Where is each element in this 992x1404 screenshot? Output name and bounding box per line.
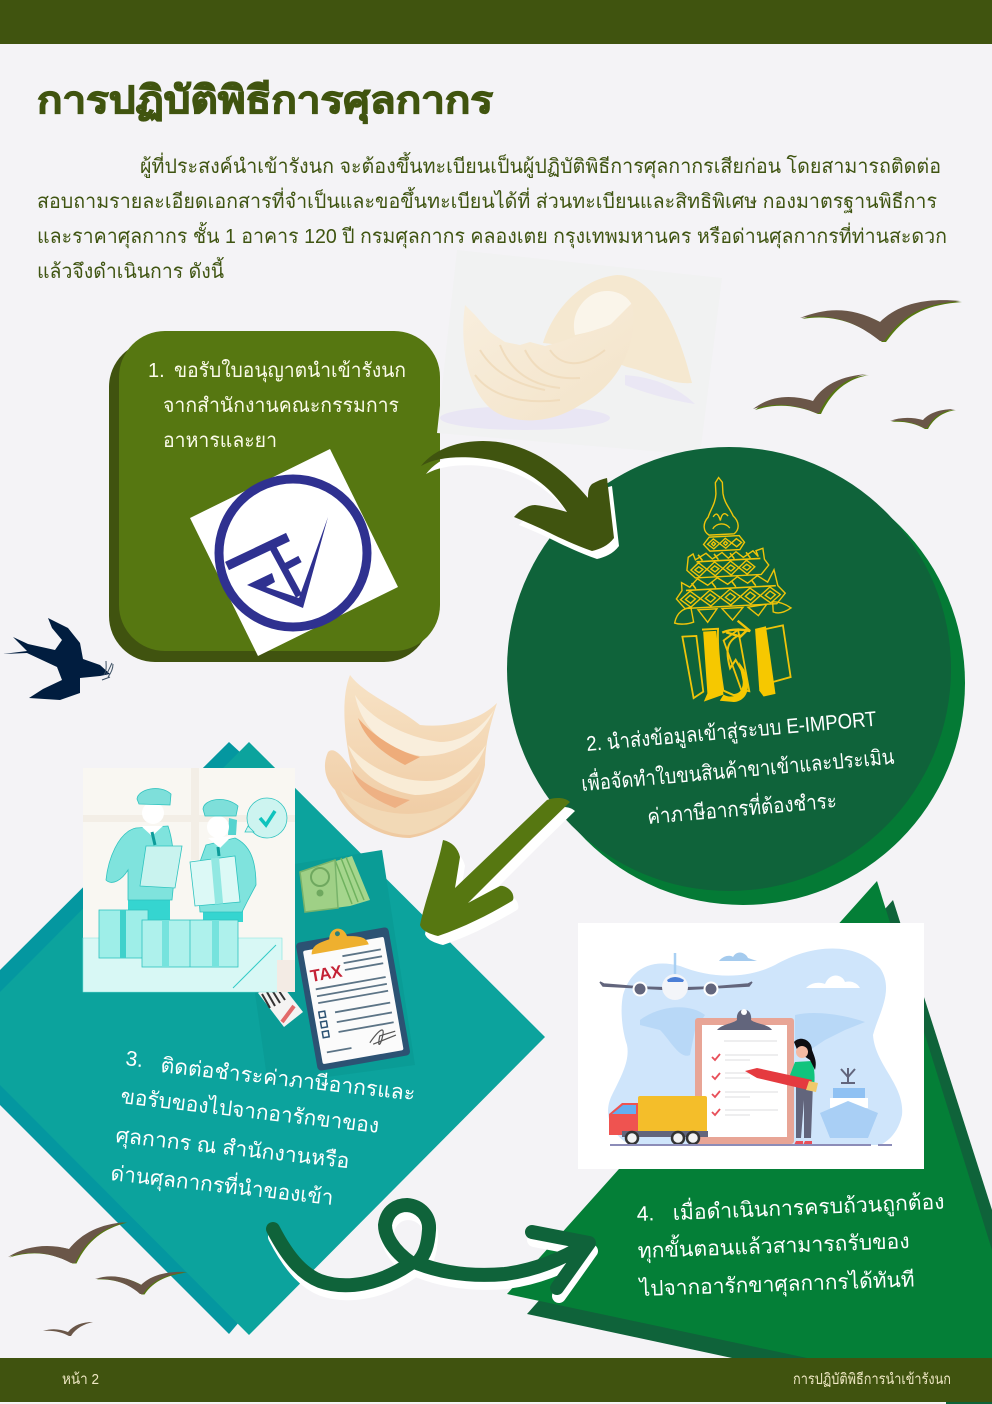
speech bubble with tick	[247, 798, 287, 838]
step 2 text: เพื่อจัดทำใบขนสินค้าขาเข้าและประเมิน	[580, 742, 895, 796]
panel: step 2 E-IMPORT	[507, 447, 965, 905]
clipboard	[695, 1018, 794, 1144]
circle front	[507, 447, 951, 891]
blue blob and map	[608, 948, 902, 1145]
step 3 text: ติดต่อชำระค่าภาษีอากรและ	[159, 1054, 416, 1106]
icon: tax clipboard	[294, 920, 411, 1071]
footer page number: หน้า 2	[62, 1371, 99, 1388]
illustration: import checklist	[578, 923, 924, 1169]
intro paragraph: และราคาศุลกากร ชั้น 1 อาคาร 120 ปี กรมศุลกากร คลองเตย กรุงเทพมหานคร หรือด่านศุลกากรที่ท่านสะดวก	[37, 222, 947, 249]
intro paragraph: ผู้ที่ประสงค์นำเข้ารังนก จะต้องขึ้นทะเบียนเป็นผู้ปฏิบัติพิธีการศุลกากรเสียก่อน โดยสามารถติดต่อ	[140, 152, 941, 179]
diamond front	[0, 742, 545, 1335]
diamond shadow	[0, 742, 400, 1334]
icon: barcode slip	[258, 980, 303, 1027]
footer bar	[0, 1358, 992, 1404]
clouds	[719, 953, 757, 961]
image: bird nest middle	[325, 675, 497, 838]
step 4 text: 4.	[636, 1202, 655, 1226]
tier one	[703, 535, 745, 551]
parcel boxes	[99, 910, 148, 958]
tier three	[675, 569, 786, 609]
truck	[638, 1096, 707, 1132]
step 1 text: ขอรับใบอนุญาตนำเข้ารังนก	[174, 359, 406, 383]
panel: step 4 release	[507, 881, 992, 1358]
step 1 text: จากสำนักงานคณะกรรมการ	[163, 395, 399, 417]
step 4 text: ไปจากอารักขาศุลกากรได้ทันที	[637, 1267, 915, 1302]
plane	[600, 982, 752, 990]
icon: swallow carrying twig	[3, 618, 113, 700]
ship	[841, 1068, 855, 1083]
icons: birds bottom left	[8, 1222, 188, 1336]
step 3 text: 3.	[124, 1047, 144, 1072]
triangle front	[507, 881, 992, 1358]
lower petals	[674, 601, 792, 625]
title: การปฏิบัติพิธีการศุลกากร	[37, 80, 494, 124]
ground line	[610, 1144, 892, 1146]
step 4 text: เมื่อดำเนินการครบถ้วนถูกต้อง	[672, 1187, 945, 1226]
step 1 text	[148, 359, 406, 452]
panel: step 3 pay duties	[0, 742, 545, 1335]
circle shadow	[521, 461, 965, 905]
male officer	[128, 895, 243, 922]
box shadow	[109, 341, 430, 662]
step 3 text: ขอรับของไปจากอารักขาของ	[119, 1084, 380, 1138]
top bar	[0, 0, 992, 44]
woman with pencil	[796, 1083, 813, 1138]
step 3 text: ศุลกากร ณ สำนักงานหรือ	[114, 1124, 351, 1174]
intro paragraph	[37, 152, 947, 283]
tier two	[686, 548, 769, 578]
step 4 text	[636, 1187, 945, 1302]
royal monogram letters	[682, 618, 792, 705]
panel: step 1 licence	[109, 331, 440, 662]
image: bird nest top	[437, 250, 722, 455]
intro paragraph: แล้วจึงดำเนินการ ดังนี้	[37, 257, 224, 283]
icon: FDA logo	[190, 449, 398, 656]
triangle shadow	[527, 900, 992, 1358]
illustration: customs officers	[83, 768, 295, 992]
image panel behind tax clipboard	[238, 850, 415, 1085]
icon: money	[300, 856, 370, 912]
step 2 text	[580, 708, 895, 829]
step 1 text: อาหารและยา	[163, 430, 277, 452]
step 2 text: 2. นำส่งข้อมูลเข้าสู่ระบบ E-IMPORT	[585, 708, 878, 757]
arrow: step 3 to step 4 loop	[273, 1205, 591, 1296]
intro paragraph: สอบถามรายละเอียดเอกสารที่จำเป็นและขอขึ้นทะเบียนได้ที่ ส่วนทะเบียนและสิทธิพิเศษ กองมาตรฐานพิธีการ	[37, 187, 937, 213]
icons: birds top right	[753, 300, 962, 429]
icon: customs emblem	[667, 474, 796, 705]
footer document title: การปฏิบัติพิธีการนำเข้ารังนก	[793, 1371, 951, 1388]
step 3 text: ด่านศุลกากรที่นำของเข้า	[109, 1158, 335, 1211]
step 3 text	[109, 1047, 416, 1211]
step 4 text: ทุกขั้นตอนแล้วสามารถรับของ	[637, 1226, 910, 1264]
step 2 text: ค่าภาษีอากรที่ต้องชำระ	[646, 786, 838, 829]
arrow: step 1 to step 2	[421, 441, 619, 559]
female officer	[197, 838, 256, 912]
icon: tax clipboard: TAX	[309, 962, 344, 986]
arrow: step 2 to step 3	[420, 798, 575, 945]
spire	[702, 477, 739, 535]
step 1 text: 1.	[148, 360, 165, 382]
box front	[119, 331, 440, 651]
counter	[83, 938, 282, 992]
